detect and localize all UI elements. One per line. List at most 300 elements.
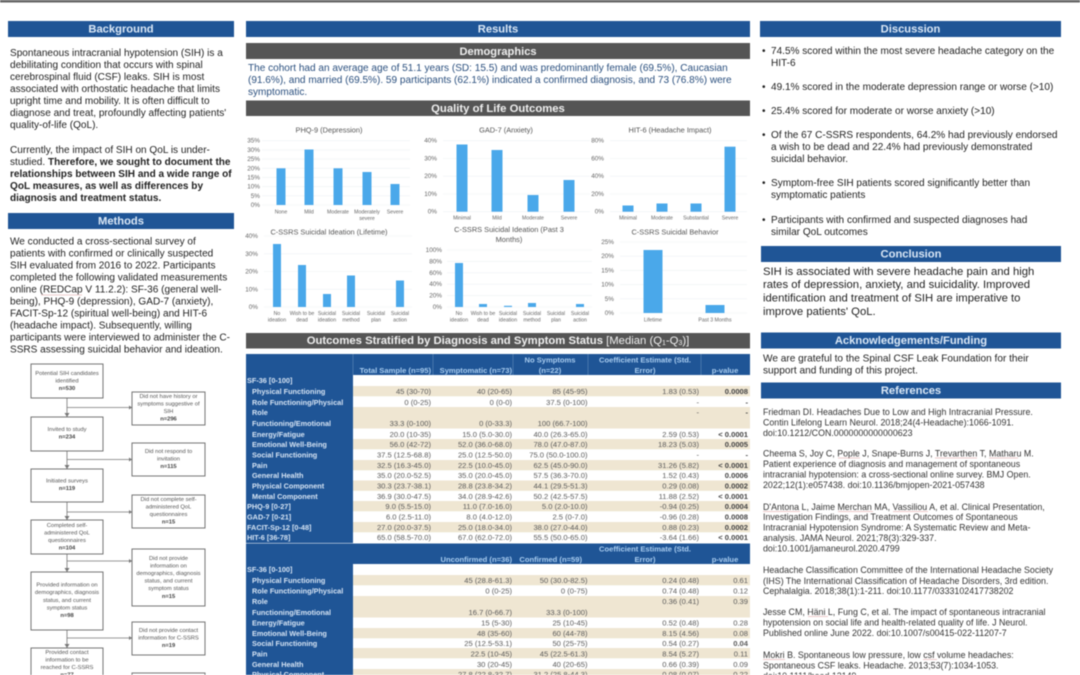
table: outcomes by symptom status: 31.26 (5.82) <box>658 460 699 470</box>
chart: C-SSRS suicidal behavior: 15% <box>601 267 614 274</box>
table: outcomes by diagnosis: Functioning/Emotional <box>252 608 331 616</box>
flow box: last exclusion <box>132 673 205 675</box>
chart: GAD-7: Severe <box>561 216 577 222</box>
text: demographics: The cohort had an average age of 51.1 years (SD: 15.5) and was predominantly female (69.5%), Caucasian <box>248 62 728 74</box>
chart: HIT-6: Moderate <box>651 216 673 222</box>
flow box: no demographics: demographics, diagnosis <box>136 571 201 577</box>
heading: outcomes stratified: -Q <box>666 335 679 347</box>
flow box: no history: n=296 <box>160 416 178 422</box>
text: discussion bullets: Of the 67 C-SSRS respondents, 64.2% had previously endorsed <box>771 130 1058 140</box>
flow box: no history <box>132 392 205 425</box>
chart: C-SSRS ideation past 3 months: 0% <box>433 304 442 310</box>
table: outcomes by symptom status: 57.5 (36.3-70.0) <box>533 470 588 480</box>
heading: outcomes stratified: )] <box>682 335 689 347</box>
chart: C-SSRS ideation past 3 months: Suicidal <box>547 311 565 317</box>
text: references: hypotension on social life and health-related quality of life. J Neurol. <box>763 618 1028 628</box>
text: discussion bullets: a wish to be dead and 22.4% had previously demonstrated <box>771 142 1032 152</box>
chart: GAD-7: 30% <box>424 155 437 162</box>
text: background: diagnosis and treatment status. <box>10 192 162 204</box>
table: outcomes by diagnosis: 0.61 <box>733 576 748 584</box>
flow box: no response: invitation <box>157 456 180 462</box>
text: references: Contin Lifelong Learn Neurol. 2018;24(4-Headache):1066-1091. <box>763 418 1014 428</box>
heading: outcomes stratified: 1 <box>662 340 666 346</box>
flow box: no contact: n=19 <box>162 643 176 649</box>
table: outcomes by diagnosis: 48 (35-60) <box>477 628 512 638</box>
text: methods: online (REDCap V 11.2.2): SF-36 (general well- <box>10 284 221 295</box>
heading: methods <box>8 213 234 229</box>
chart: PHQ-9: 10% <box>247 183 260 190</box>
flow box: completed <box>31 520 103 554</box>
panel: discussion <box>760 21 1061 238</box>
text: references: Cephalalgia. 2018;38(1):1-211. doi:10.1177/0333102417738202 <box>763 586 1014 596</box>
table: outcomes by symptom status: 35.0 (20.0-52.5) <box>377 470 431 480</box>
chart: C-SSRS suicidal behavior <box>601 228 747 324</box>
table: outcomes by diagnosis: 0.74 (0.48) <box>662 586 699 595</box>
text: acknowledgements: We are grateful to the Spinal CSF Leak Foundation for their <box>763 353 1029 364</box>
chart: C-SSRS ideation past 3 months: action <box>573 318 587 324</box>
text: background: Currently, the impact of SIH on QoL is under- <box>10 144 210 156</box>
chart: HIT-6: Substantial <box>683 216 709 222</box>
table: outcomes by diagnosis: Role Functioning/Physical <box>252 586 343 595</box>
table: outcomes by diagnosis: 0.28 <box>733 618 748 627</box>
chart: HIT-6: 40% <box>591 173 604 180</box>
text: conclusion: identification and treatment of SIH are imperative to <box>763 292 1020 304</box>
panel: background <box>8 21 234 204</box>
flow box: provided information: n=98 <box>60 613 74 619</box>
flow box: no demographics <box>132 549 205 606</box>
text: references: Spontaneous CSF leaks. Headache. 2013;53(7):1034-1053. <box>763 660 999 670</box>
text: background: debilitating condition that occurs with spinal <box>10 60 203 70</box>
flow box: no demographics: n=15 <box>162 594 176 600</box>
flow box: provided information: status, and current <box>43 598 91 604</box>
table: outcomes by symptom status: 0.0008 <box>725 386 748 396</box>
text: methods: completed the following validated measurements <box>10 272 227 283</box>
table: outcomes by diagnosis: Coefficient Estimate (Std. <box>599 544 691 553</box>
table: outcomes by diagnosis: 0.04 <box>733 638 749 648</box>
heading: outcomes stratified: Outcomes Stratified by Diagnosis and Symptom Status [Median (Q <box>307 335 662 347</box>
chart: C-SSRS suicidal behavior: Lifetime <box>644 318 662 324</box>
text: discussion bullets: symptomatic patients <box>771 190 865 200</box>
table: outcomes by diagnosis: Confirmed (n=59) <box>519 554 582 564</box>
heading: results: Results <box>478 24 518 36</box>
chart: HIT-6: 60% <box>591 155 604 162</box>
table: outcomes by symptom status: 5.0 (2.0-10.0) <box>542 502 588 510</box>
text: references: analysis. JAMA Neurol. 2021;78(3):329-337. <box>763 533 937 543</box>
chart: HIT-6 <box>591 126 747 222</box>
text: background: relationships between SIH and a wide range of <box>10 168 232 180</box>
table: outcomes by diagnosis: 16.7 (0-66.7) <box>469 608 512 616</box>
table: outcomes by symptom status: 40.0 (26.3-65.0) <box>533 430 588 438</box>
chart: PHQ-9: 20% <box>247 165 260 172</box>
text: background: Therefore, we sought to document the <box>48 156 231 168</box>
flow box: provided information <box>31 572 103 630</box>
table: outcomes by symptom status: 2.59 (0.53) <box>662 430 699 438</box>
text: methods: patients with confirmed or clinically suspected <box>10 248 213 259</box>
text: references: D'Antona L, Jaime Merchan MA, Vassiliou A, et al. Clinical Presentation, <box>763 502 1045 512</box>
heading: background <box>8 21 234 37</box>
chart: C-SSRS ideation lifetime: 10% <box>245 286 258 293</box>
heading: references: References <box>881 385 941 397</box>
chart: C-SSRS ideation lifetime: action <box>393 318 407 324</box>
chart: PHQ-9: severe <box>359 216 375 222</box>
table: outcomes by symptom status: HIT-6 [36-78] <box>247 532 291 542</box>
table: outcomes by symptom status: No Symptoms <box>524 355 576 364</box>
chart: GAD-7: Moderate <box>522 216 544 222</box>
chart: C-SSRS ideation lifetime: ideation <box>318 318 336 324</box>
heading: acknowledgements <box>761 332 1061 348</box>
table: outcomes by symptom status: 15.0 (5.0-30.0) <box>462 430 512 438</box>
text: references: (IHS) The International Classification of Headache Disorders, 3rd edition. <box>763 576 1048 586</box>
table: outcomes by diagnosis: Social Functioning <box>252 638 317 648</box>
chart: PHQ-9: 25% <box>247 156 260 163</box>
table: outcomes by diagnosis: p-value <box>712 554 738 564</box>
table: outcomes by diagnosis: Pain <box>252 649 267 658</box>
table: outcomes by symptom status: -0.96 (0.28) <box>660 512 699 521</box>
panel: conclusion <box>761 246 1061 318</box>
chart: HIT-6: 80% <box>591 137 604 144</box>
table: outcomes by symptom status: Pain <box>252 460 267 470</box>
table: outcomes by diagnosis: 30 (20-45) <box>477 660 512 668</box>
chart: C-SSRS ideation lifetime: 40% <box>245 232 258 240</box>
table: outcomes by symptom status: 30.3 (23.7-38.1) <box>377 481 431 490</box>
table: outcomes by diagnosis: 25 (10-45) <box>552 618 588 627</box>
table: outcomes by symptom status: 27.0 (20.0-37.5) <box>377 522 431 532</box>
table: outcomes by diagnosis: 0.08 <box>733 628 748 638</box>
panel: acknowledgements <box>761 332 1061 376</box>
flow box: invited <box>31 417 103 451</box>
text: discussion bullets: 49.1% scored in the moderate depression range or worse (>10) <box>771 82 1053 92</box>
flow box: invited: Invited to study <box>48 427 87 433</box>
table: outcomes by diagnosis: 50 (30.0-82.5) <box>540 576 588 584</box>
flow box: completed: questionnaires <box>48 538 86 544</box>
flow box: not completed: questionnaires <box>150 512 187 518</box>
table: outcomes by symptom status: 0.0002 <box>725 481 748 490</box>
table: outcomes by diagnosis: 25 (12.5-53.1) <box>464 638 512 648</box>
text: conclusion: improve patients' QoL. <box>763 306 876 318</box>
heading: quality of life outcomes <box>246 100 750 116</box>
chart: C-SSRS ideation past 3 months: C-SSRS Suicidal Ideation (Past 3 <box>454 224 564 234</box>
flow box: no contact: information for C-SSRS <box>138 636 199 642</box>
chart: C-SSRS ideation lifetime: dead <box>296 318 308 324</box>
table: outcomes by diagnosis: SF-36 [0-100] <box>247 564 293 574</box>
table: outcomes by diagnosis: 60 (44-78) <box>552 628 588 638</box>
table: outcomes by symptom status: 100 (66.7-100) <box>538 418 588 428</box>
heading: acknowledgements: Acknowledgements/Funding <box>835 335 987 347</box>
table: outcomes by diagnosis: 45 (28.8-61.3) <box>464 576 512 584</box>
flow box: not completed: administered QoL <box>146 504 192 510</box>
heading: results <box>246 21 750 37</box>
table: outcomes by diagnosis: Energy/Fatigue <box>252 618 305 627</box>
flow box: candidates: Potential SIH candidates <box>35 371 99 377</box>
chart: C-SSRS ideation past 3 months: dead <box>477 318 489 324</box>
table: outcomes by symptom status: -3.64 (1.66) <box>660 532 699 542</box>
flow box: candidates: n=530 <box>59 386 75 392</box>
text: background: diagnose and treat, profoundly affecting patients' <box>10 108 226 118</box>
table: outcomes by symptom status: Role Functioning/Physical <box>252 398 343 406</box>
table: outcomes by symptom status: Mental Component <box>252 492 318 500</box>
flow box: contact information: Provided contact <box>45 650 89 656</box>
text: methods: SSRS assessing suicidal behavior and ideation. <box>10 344 223 355</box>
table: outcomes by diagnosis: Physical Functioning <box>252 576 325 584</box>
chart: C-SSRS ideation past 3 months: 100% <box>426 246 442 254</box>
text: discussion bullets: • <box>762 82 766 92</box>
flow box: no response: Did not respond to <box>145 449 192 455</box>
table: outcomes by symptom status: 40 (20-65) <box>477 386 512 396</box>
table: outcomes by symptom status: 0.29 (0.08) <box>662 481 699 490</box>
heading: background: Background <box>88 24 154 36</box>
table: outcomes by symptom status: Social Functioning <box>252 450 317 459</box>
flow box: initiated: Initiated surveys <box>46 478 88 484</box>
heading: conclusion: Conclusion <box>881 248 942 260</box>
table: outcomes by diagnosis: 8.54 (5.27) <box>662 649 699 658</box>
text: discussion bullets: • <box>762 46 766 56</box>
chart: GAD-7: 40% <box>424 137 437 144</box>
chart: C-SSRS suicidal behavior: Past 3 Months <box>698 318 732 324</box>
chart: PHQ-9: Moderately <box>354 210 380 216</box>
text: discussion bullets: suicidal behavior. <box>771 154 848 164</box>
table: outcomes by symptom status: GAD-7 [0-21] <box>247 512 292 521</box>
top bar <box>0 0 1080 2</box>
flow box: not completed: n=15 <box>162 520 176 526</box>
table: outcomes by symptom status: 0 (0-33.3) <box>479 418 512 428</box>
flow box: no demographics: status, and current <box>144 578 193 584</box>
table: outcomes by symptom status: 65.0 (58.5-70.0) <box>377 532 431 542</box>
flow box: no response <box>132 443 205 476</box>
text: references: 2022;12(1):e057438. doi:10.1136/bmjopen-2021-057438 <box>763 480 985 490</box>
table: outcomes by symptom status: Symptomatic (n=73) <box>440 366 512 374</box>
chart: PHQ-9: 5% <box>251 192 260 199</box>
table: outcomes by diagnosis: 8.15 (4.56) <box>662 628 699 638</box>
flow box: not completed: Did not complete self- <box>140 497 197 503</box>
table: outcomes by diagnosis: 0.09 <box>733 660 748 668</box>
chart: PHQ-9: 35% <box>247 137 260 144</box>
flow box: no history: symptoms suggestive of <box>137 402 200 408</box>
table: outcomes by symptom status: 25.0 (18.0-34.0) <box>458 522 512 532</box>
flow box: no history: SIH <box>164 409 173 415</box>
flow box: no demographics: symptom status <box>148 586 189 592</box>
table: outcomes by diagnosis: 0.12 <box>733 586 748 595</box>
heading: quality of life outcomes: Quality of Life Outcomes <box>431 103 565 115</box>
chart: C-SSRS suicidal behavior: 5% <box>605 295 614 302</box>
text: references: Jesse CM, Häni L, Fung C, et al. The impact of spontaneous intracranial <box>763 607 1046 617</box>
table: outcomes by symptom status: - <box>745 450 748 459</box>
table: outcomes by symptom status: 52.0 (36.0-68.0) <box>458 440 512 448</box>
text: references: Friedman DI. Headaches Due to Low and High Intracranial Pressure. <box>763 407 1033 417</box>
chart: C-SSRS ideation lifetime: Suicidal <box>342 311 360 317</box>
table: outcomes by symptom status: - <box>745 408 748 416</box>
chart: GAD-7: Minimal <box>453 216 471 222</box>
table: outcomes by symptom status: Role <box>252 408 268 416</box>
chart: PHQ-9: 15% <box>247 174 260 181</box>
table: outcomes by symptom status: 32.5 (16.3-45.0) <box>377 460 431 470</box>
chart: PHQ-9: 0% <box>251 202 260 208</box>
table: outcomes by diagnosis: 0.11 <box>734 649 748 658</box>
table: outcomes by symptom status <box>246 354 750 543</box>
table: outcomes by symptom status: 8.0 (4.0-12.0) <box>466 512 512 521</box>
chart: HIT-6: 20% <box>591 190 604 198</box>
text: conclusion: rates of depression, anxiety, and suicidality. Improved <box>763 279 1030 291</box>
text: references: Mokri B. Spontaneous low pressure, low csf volume headaches: <box>763 650 1014 660</box>
table: outcomes by diagnosis: 0.39 <box>733 596 748 606</box>
panel: references <box>761 382 1061 675</box>
flow box: completed: Completed self- <box>47 523 87 529</box>
chart: PHQ-9: Moderate <box>327 210 349 216</box>
table: outcomes by symptom status: p-value <box>712 366 738 374</box>
table: outcomes by symptom status: 56.0 (42-72) <box>390 440 431 448</box>
chart: PHQ-9: Severe <box>387 210 403 216</box>
chart: PHQ-9: Mild <box>304 210 314 216</box>
chart: C-SSRS suicidal behavior: 0% <box>605 310 614 316</box>
text: discussion bullets: • <box>762 130 766 140</box>
table: outcomes by symptom status: 37.5 (12.5-68.8) <box>377 450 431 459</box>
heading: outcomes stratified <box>246 333 750 348</box>
text: conclusion: SIH is associated with severe headache pain and high <box>763 266 1034 278</box>
text: background: associated with orthostatic headache that limits <box>10 84 220 94</box>
text: background: QoL measures, as well as differences by <box>10 180 203 192</box>
table: outcomes by diagnosis: Unconfirmed (n=36) <box>440 554 512 564</box>
text: background: upright time and mobility. It is often difficult to <box>10 96 210 106</box>
flow box: candidates: identified <box>55 378 79 384</box>
chart: GAD-7: 20% <box>424 173 437 180</box>
text: background: cerebrospinal fluid (CSF) leaks. SIH is most <box>10 72 205 82</box>
table: outcomes by diagnosis: Emotional Well-Being <box>252 628 327 638</box>
chart: C-SSRS ideation past 3 months: plan <box>551 318 561 324</box>
table: outcomes by diagnosis: Role <box>252 596 268 606</box>
table: outcomes by diagnosis: Error) <box>634 554 656 564</box>
flow box: initiated <box>31 469 103 502</box>
chart: HIT-6: Minimal <box>619 216 637 222</box>
table: outcomes by symptom status: 11.0 (7.0-16.0) <box>463 502 512 510</box>
panel: results <box>246 21 750 116</box>
text: references: Cheema S, Joy C, Pople J, Snape-Burns J, Trevarthen T, Matharu M. <box>763 448 1034 458</box>
flow box: contact information <box>31 648 103 675</box>
text: references: Intracranial Hypotension Syndrome: A Systematic Review and Meta- <box>763 522 1030 532</box>
chart: C-SSRS ideation lifetime: Suicidal <box>367 311 385 317</box>
chart: C-SSRS ideation lifetime: method <box>342 318 360 324</box>
table: outcomes by symptom status: 20.0 (10-35) <box>390 430 431 438</box>
table: outcomes by diagnosis: 0.24 (0.48) <box>662 576 699 584</box>
text: references: doi:10.1212/CON.0000000000000623 <box>763 428 913 438</box>
table: outcomes by symptom status: 62.5 (45.0-90.0) <box>533 460 588 470</box>
text: references: intracranial hypotension: a cross-sectional online survey. BMJ Open. <box>763 470 1031 480</box>
table: outcomes by symptom status: -0.94 (0.25) <box>660 502 699 510</box>
text: discussion bullets: • <box>762 214 766 226</box>
table: outcomes by diagnosis: 0.52 (0.48) <box>662 618 699 627</box>
text: references: Patient experience of diagnosis and management of spontaneous <box>763 459 1021 469</box>
table: outcomes by symptom status: 0.88 (0.23) <box>662 522 699 532</box>
table: outcomes by symptom status: 75.0 (50.0-100.0) <box>529 450 588 459</box>
table: outcomes by symptom status: General Health <box>252 470 304 480</box>
table: outcomes by symptom status: 18.23 (5.03) <box>658 440 699 448</box>
table: outcomes by symptom status: 0.0004 <box>725 502 749 510</box>
table: outcomes by symptom status: 6.0 (2.5-11.0) <box>386 512 431 521</box>
table: outcomes by symptom status: Physical Component <box>252 481 325 490</box>
text: methods: being), PHQ-9 (depression), GAD-7 (anxiety), <box>10 296 213 307</box>
chart: C-SSRS ideation past 3 months: 80% <box>429 258 442 265</box>
heading: demographics <box>246 43 750 59</box>
chart: C-SSRS ideation lifetime: 0% <box>249 304 258 310</box>
chart: C-SSRS ideation lifetime: ideation <box>268 318 286 324</box>
table: outcomes by diagnosis <box>246 544 750 675</box>
flow box: no history: Did not have history or <box>140 394 198 400</box>
text: methods: SIH evaluated from 2016 to 2022. Participants <box>10 260 216 271</box>
chart: HIT-6: HIT-6 (Headache Impact) <box>629 126 711 134</box>
chart: C-SSRS suicidal behavior: C-SSRS Suicidal Behavior <box>631 228 719 236</box>
table: outcomes by symptom status: Emotional Well-Being <box>252 440 327 448</box>
chart: C-SSRS ideation past 3 months: method <box>523 318 541 324</box>
table: outcomes by symptom status: 0 (0-0) <box>490 398 512 406</box>
chart: PHQ-9: 30% <box>247 146 260 153</box>
heading: discussion <box>760 21 1061 37</box>
panel: methods <box>8 213 234 355</box>
chart: C-SSRS ideation past 3 months: ideation <box>450 318 468 324</box>
table: outcomes by diagnosis: 33.3 (0-100) <box>546 608 588 616</box>
table: outcomes by symptom status: 85 (45-95) <box>552 386 588 396</box>
chart: C-SSRS ideation past 3 months: Suicidal <box>571 311 589 317</box>
chart: GAD-7: Mild <box>492 216 502 222</box>
flow box: provided information: symptom status <box>47 606 87 612</box>
text: discussion bullets: HIT-6 <box>771 58 796 68</box>
table: outcomes by symptom status: 50.2 (42.5-57.5) <box>533 492 588 500</box>
text: discussion bullets: • <box>762 106 766 116</box>
chart: C-SSRS ideation past 3 months: Months) <box>496 234 522 244</box>
flow box: no contact <box>132 622 205 655</box>
text: discussion bullets: Participants with confirmed and suspected diagnoses had <box>771 214 1027 226</box>
text: discussion bullets: similar QoL outcomes <box>771 226 868 238</box>
table: outcomes by diagnosis: 40 (20-65) <box>552 660 588 668</box>
table: outcomes by symptom status: 0.0002 <box>725 522 748 532</box>
text: demographics: symptomatic. <box>248 86 307 98</box>
text: references: Investigation Findings, and Treatment Outcomes of Spontaneous <box>763 512 1018 522</box>
flow box: no demographics: Did not provide <box>149 556 188 562</box>
table: outcomes by symptom status: SF-36 [0-100] <box>247 376 293 384</box>
flow box: no contact: Did not provide contact <box>139 628 199 634</box>
chart: C-SSRS ideation lifetime <box>245 228 412 324</box>
heading: outcomes stratified: 3 <box>678 340 682 346</box>
table: outcomes by symptom status: 0.0006 <box>725 470 748 480</box>
chart: PHQ-9: PHQ-9 (Depression) <box>296 126 362 134</box>
chart: C-SSRS ideation lifetime: C-SSRS Suicidal Ideation (Lifetime) <box>270 228 388 236</box>
flow box: completed: n=104 <box>59 546 76 552</box>
heading: conclusion <box>761 246 1061 262</box>
table: outcomes by diagnosis: 45 (22.5-61.3) <box>540 649 588 658</box>
text: demographics: (91.6%), and married (69.5%). 59 participants (62.1%) indicated a confirmed diagnosis, and 73 (76.8%) were <box>248 74 732 86</box>
table: outcomes by symptom status: < 0.0001 <box>718 492 749 500</box>
table: outcomes by symptom status: 9.0 (5.5-15.0) <box>385 502 431 510</box>
chart: C-SSRS ideation past 3 months: 40% <box>429 281 442 288</box>
table: outcomes by symptom status: FACIT-Sp-12 [0-48] <box>247 522 312 532</box>
heading: demographics: Demographics <box>459 46 537 58</box>
flow box: provided information: demographics, diagnosis <box>35 590 99 596</box>
table: outcomes by symptom status: 35.0 (20.0-45.0) <box>458 470 512 480</box>
table: outcomes by symptom status: Total Sample (n=95) <box>360 366 431 374</box>
chart: C-SSRS ideation lifetime: Suicidal <box>318 311 336 317</box>
flowchart: participant selection <box>31 364 205 675</box>
chart: C-SSRS ideation past 3 months: ideation <box>499 318 517 324</box>
text: discussion bullets: 74.5% scored within the most severe headache category on the <box>771 46 1055 56</box>
text: methods: FACIT-Sp-12 (spiritual well-being) and HIT-6 <box>10 308 208 319</box>
table: outcomes by symptom status: 2.5 (0-7.0) <box>552 512 588 521</box>
table: outcomes by symptom status: 22.5 (10.0-45.0) <box>458 460 512 470</box>
heading: methods: Methods <box>98 216 144 228</box>
chart: C-SSRS suicidal behavior: 25% <box>601 238 614 246</box>
chart: C-SSRS ideation past 3 months: Suicidal <box>499 311 517 317</box>
chart: GAD-7: 0% <box>428 208 437 215</box>
text: background: studied. <box>10 156 48 168</box>
text: methods: participants were interviewed to administer the C- <box>10 332 230 343</box>
table: outcomes by diagnosis: 15 (5-30) <box>481 618 512 627</box>
chart: C-SSRS ideation lifetime: Suicidal <box>391 311 409 317</box>
